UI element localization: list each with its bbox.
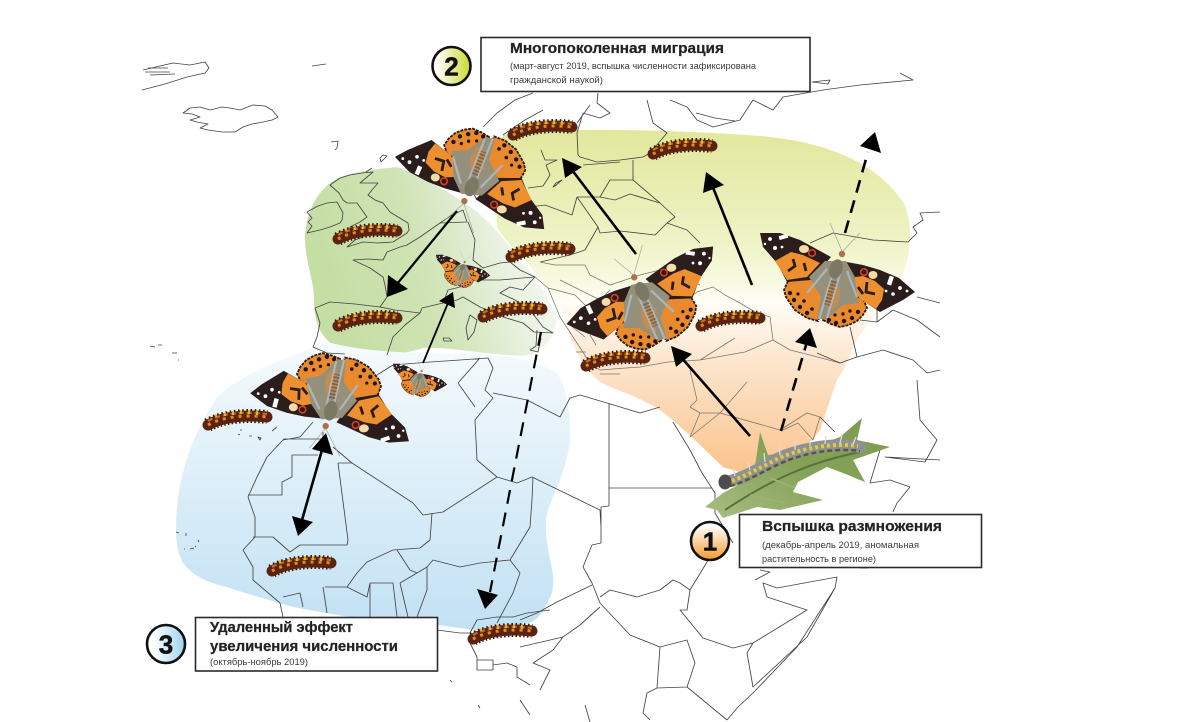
region: western Europe green area bbox=[305, 167, 556, 356]
region: eastern Europe yellow and Middle East orange area bbox=[496, 130, 910, 480]
text box: breeding outbreak: Вспышка размножения bbox=[762, 518, 942, 535]
callout circle 2: 2 bbox=[444, 52, 459, 82]
text box: remote population increase: (октябрь-ноябрь 2019) bbox=[210, 656, 308, 667]
text box: breeding outbreak: (декабрь-апрель 2019, аномальная bbox=[762, 539, 919, 550]
text box: remote population increase bbox=[196, 618, 438, 671]
butterfly: Caspian bbox=[760, 223, 915, 327]
text box: multigenerational migration: (март-август 2019, вспышка численности зафиксирована bbox=[510, 60, 757, 71]
arrow: to Russia bbox=[703, 172, 752, 285]
map: Greenland, Iceland and north Atlantic islands bbox=[142, 62, 387, 549]
map: country outlines bbox=[142, 62, 985, 722]
map: Scandinavia, Baltic and Russia bbox=[503, 93, 700, 262]
text box: multigenerational migration bbox=[481, 38, 810, 92]
caterpillars: small larvae across the map bbox=[208, 120, 760, 639]
map: Arabian Peninsula bbox=[690, 370, 985, 580]
leaf bbox=[705, 418, 890, 518]
text box: multigenerational migration: Многопоколенная миграция bbox=[510, 40, 724, 57]
callout circle 3 bbox=[147, 625, 185, 663]
map: western and central Europe coasts and borders bbox=[315, 210, 463, 308]
butterfly: small Algeria bbox=[393, 360, 447, 397]
arrow: Netherlands to France bbox=[387, 211, 457, 297]
butterfly: Black Sea bbox=[558, 237, 725, 359]
arrow: dashed to north-east bbox=[845, 132, 881, 233]
callout circle 1 bbox=[691, 522, 729, 560]
illustration: leaf with large caterpillar bbox=[705, 418, 890, 518]
arrow: Europe to Scandinavia bbox=[562, 158, 636, 254]
text box: breeding outbreak bbox=[740, 514, 982, 568]
large caterpillar bbox=[726, 445, 860, 482]
text box: multigenerational migration: гражданской наукой) bbox=[510, 74, 603, 85]
butterfly: small Alps bbox=[436, 251, 490, 288]
region: west Africa blue area bbox=[176, 342, 570, 630]
map: British Isles bbox=[307, 172, 409, 247]
map: Balkans, Turkey and Caucasus bbox=[535, 262, 840, 374]
arrow: double Morocco and Mauritania bbox=[292, 433, 333, 536]
map: Central Asia and Iran bbox=[810, 212, 940, 462]
text box: breeding outbreak: растительность в регионе) bbox=[762, 553, 876, 564]
map: North Africa bbox=[243, 358, 712, 688]
arrow: Middle East to Turkey bbox=[671, 346, 750, 436]
callout circle 2 bbox=[432, 47, 470, 85]
arrow: dashed Middle East to Caucasus bbox=[781, 328, 817, 431]
callout circle 3: 3 bbox=[159, 630, 173, 660]
text box: remote population increase: увеличения численности bbox=[210, 638, 398, 655]
arrow: dashed Italy to Gulf of Guinea bbox=[477, 332, 541, 609]
map: central and east Africa bbox=[437, 585, 657, 722]
text box: remote population increase: Удаленный эффект bbox=[210, 619, 353, 636]
butterfly: Morocco bbox=[248, 348, 410, 462]
arrow: Algeria to Alps bbox=[423, 292, 455, 363]
butterfly: North Sea bbox=[389, 122, 552, 239]
callout circle 1: 1 bbox=[703, 526, 717, 556]
